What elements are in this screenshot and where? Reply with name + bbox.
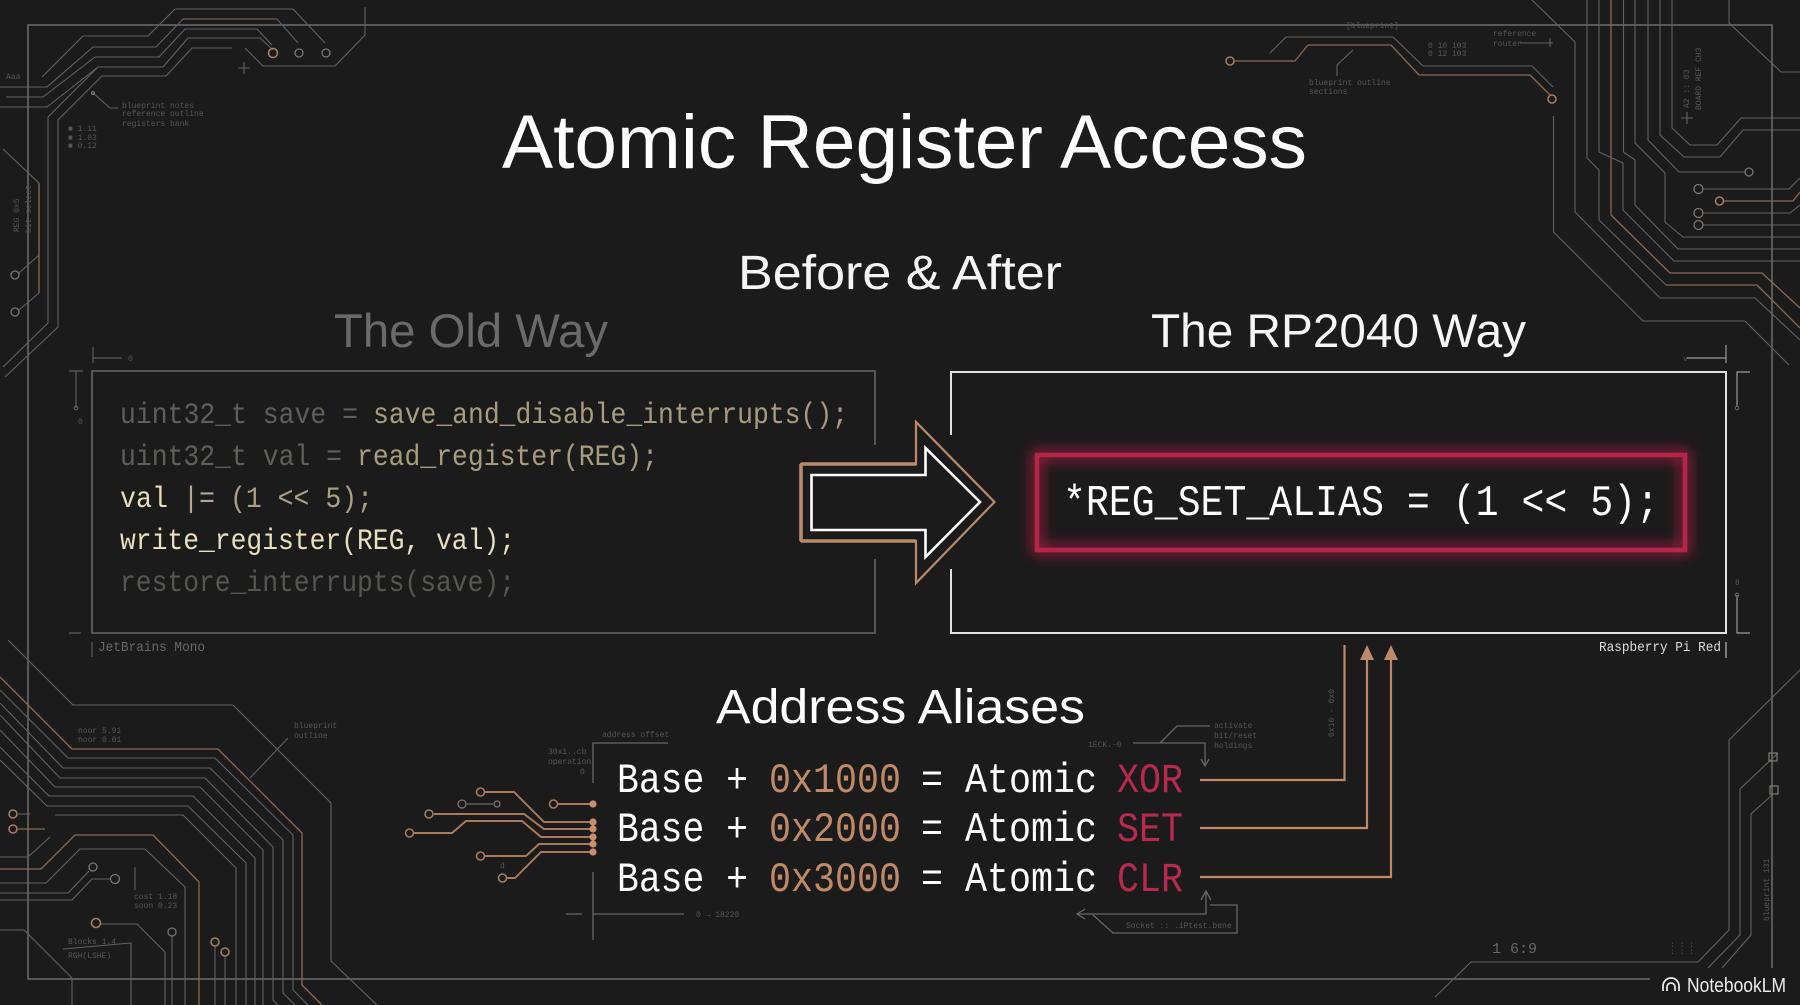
circuit traces: top right: BOARD REF CH3 [1695, 47, 1704, 110]
annotation: right of aliases: Socket :: .iPtest.bene [1126, 922, 1232, 931]
circuit traces: bottom right: : : : [1670, 941, 1694, 950]
annotation: address offset: 0 [580, 768, 585, 777]
circuit traces: bottom left: noor 0.01 [78, 736, 121, 745]
circuit traces: top left: ■ 1.11 [68, 125, 97, 134]
annotation: right of aliases: activate [1214, 722, 1253, 731]
circuit traces: bottom left: noor 5.91 [78, 727, 121, 736]
panel: RP2040 way: v [1683, 355, 1688, 364]
annotation: right of aliases: 1ECK.-0 [1088, 741, 1122, 750]
code: old way: read_register(REG); [357, 441, 658, 475]
panel: old way: 0 [128, 355, 133, 364]
annotation: right of aliases [1077, 689, 1337, 933]
alias row: SET: Base + [617, 806, 748, 854]
panel: RP2040 way: 8 [1735, 579, 1740, 588]
arrow: old to new [801, 422, 994, 583]
heading: old way: The Old Way [334, 304, 609, 357]
circuit traces: top right: blueprint outline [1309, 79, 1391, 88]
code: old way: restore_interrupts(save); [120, 567, 515, 601]
circuit traces: bottom right [1435, 670, 1800, 997]
circuit traces: bottom right: blueprint 131 [1763, 858, 1772, 921]
circuit traces: top right: [blueprint] [1346, 22, 1399, 31]
circuit traces: top left: bit select [25, 185, 34, 233]
alias row: SET [617, 806, 1183, 854]
annotation: address offset: 0 → 18220 [696, 911, 739, 920]
circuit traces: bottom left: cost 1.18 [134, 893, 177, 902]
circuit traces: top left [0, 7, 365, 377]
heading: address aliases: Address Aliases [716, 681, 1085, 734]
alias row: XOR: = Atomic [921, 757, 1097, 805]
code: old way: save_and_disable_interrupts(); [373, 399, 848, 433]
alias row: CLR [617, 856, 1183, 904]
alias row: CLR: Base + [617, 856, 748, 904]
annotation: address offset: 30x1..cb [548, 748, 587, 757]
alias table [617, 757, 1183, 904]
annotation: address offset [548, 731, 739, 940]
annotation: right of aliases: bit/reset [1214, 732, 1257, 741]
panel: RP2040 way [951, 345, 1750, 658]
annotation: address offset: operation [548, 758, 591, 767]
circuit traces: top left: blueprint notes [122, 102, 194, 111]
heading: RP2040 way: The RP2040 Way [1151, 304, 1526, 357]
circuit traces: bottom left: Blocks 1.4 [68, 938, 116, 947]
code: old way: (1 << 5); [230, 483, 373, 517]
circuit traces: top right: sections [1309, 88, 1348, 97]
title: Atomic Register Access [502, 100, 1307, 185]
subtitle: Before & After [738, 247, 1062, 300]
circuit traces: bottom left: RGH(LSHE) [68, 952, 111, 961]
circuit traces: top right: 0 10 103 [1428, 42, 1467, 51]
circuit traces: bottom right: : : : [1670, 948, 1694, 957]
code: old way: uint32_t val = [120, 441, 342, 475]
icon: trace fan into alias table: d [500, 862, 505, 871]
logo: NotebookLM: NotebookLM [1687, 975, 1786, 997]
alias row: XOR: 0x1000 [769, 757, 901, 805]
circuit traces: top right: reference [1493, 30, 1536, 39]
code: old way: uint32_t save = [120, 399, 358, 433]
icon: trace fan into alias table [406, 788, 597, 882]
callout: red glow box: *REG_SET_ALIAS = (1 << 5); [1063, 479, 1659, 529]
circuit traces: bottom right: 1 6:9 [1492, 941, 1537, 958]
circuit traces: top right: A2 :: 03 [1683, 69, 1692, 108]
circuit traces: top left: ■ 1.03 [68, 134, 97, 143]
annotation: right of aliases: holdings [1214, 742, 1253, 751]
alias row: CLR: CLR [1117, 856, 1183, 904]
alias row: XOR [617, 757, 1183, 805]
alias row: SET: = Atomic [921, 806, 1097, 854]
alias row: CLR: 0x3000 [769, 856, 901, 904]
alias row: CLR: = Atomic [921, 856, 1097, 904]
circuit traces: top left: reference outline [122, 110, 204, 119]
alias row: XOR: Base + [617, 757, 748, 805]
circuit traces: top left: registers bank [122, 120, 189, 129]
code: old way [120, 399, 848, 601]
code: old way: write_register(REG, val); [120, 525, 515, 559]
alias row: SET: SET [1117, 806, 1183, 854]
colour label: Raspberry Pi Red [1599, 640, 1721, 656]
annotation: right of aliases: 0x10 - 0x0 [1328, 689, 1337, 737]
circuit traces: top right [1226, 0, 1800, 365]
alias row: XOR: XOR [1117, 757, 1183, 805]
circuit traces: bottom left: blueprint [294, 722, 337, 731]
circuit traces: bottom left: outline [294, 732, 328, 741]
circuit traces: top left: Aaa [6, 73, 21, 82]
panel: old way [69, 347, 875, 657]
panel: old way: 0 [78, 418, 83, 427]
code: old way: |= [183, 483, 215, 517]
code: old way: val [120, 483, 168, 517]
circuit traces: top right: router [1493, 40, 1522, 49]
circuit traces: top left: ■ 0.12 [68, 142, 97, 151]
arrows: alias connectors [1200, 645, 1398, 877]
callout: red glow box [1037, 455, 1685, 550]
circuit traces: bottom left: soon 0.23 [134, 902, 177, 911]
circuit traces: top right: 0 12 103 [1428, 50, 1467, 59]
circuit traces: top left: REG 0x5 [13, 198, 22, 232]
annotation: address offset: address offset [602, 731, 669, 740]
alias row: SET: 0x2000 [769, 806, 901, 854]
font label: JetBrains Mono [98, 640, 205, 656]
circuit traces: bottom left [0, 640, 377, 1005]
